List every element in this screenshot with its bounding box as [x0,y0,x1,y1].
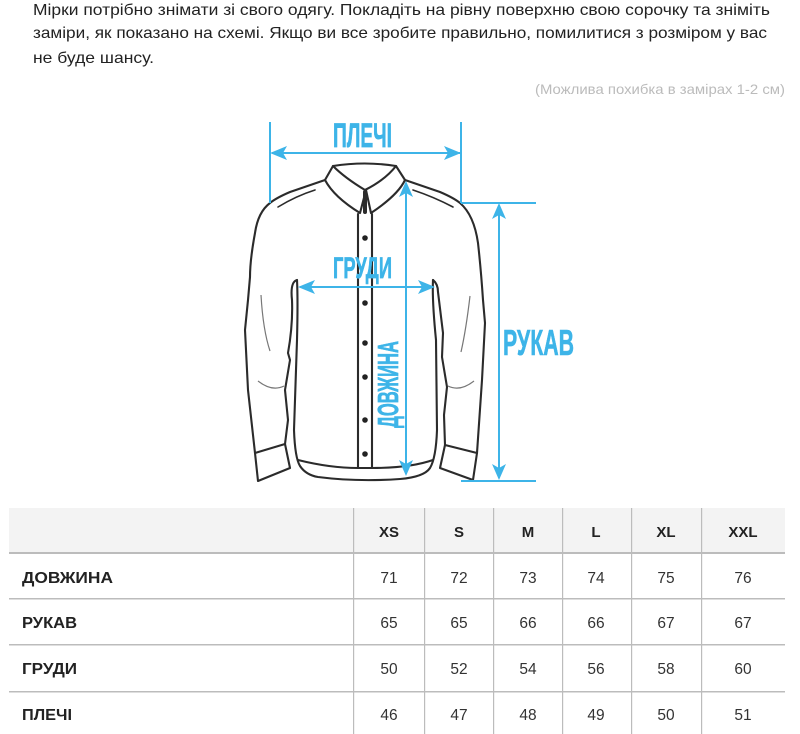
intro text: Мірки потрібно знімати зі свого одягу. Покладіть на рівну поверхню свою сорочку та зніміть [33,2,770,19]
shoulder measure arrow [269,122,462,203]
table values: 56 [587,661,605,678]
row labels: ДОВЖИНА [22,570,113,587]
table values: 72 [450,570,468,587]
shirt outline [245,164,485,481]
chest measure arrow [298,280,435,294]
table values: 48 [519,707,537,724]
table values: 51 [734,707,752,724]
table values: 60 [734,661,752,678]
sleeve label: РУКАВ [503,322,574,363]
table values: 52 [450,661,468,678]
size headers [379,524,758,541]
table values: 75 [657,570,675,587]
table values: 58 [657,661,675,678]
table values: 74 [587,570,605,587]
measurement error note: (Можлива похибка в замірах 1-2 см) [535,81,785,97]
table values: 65 [380,615,398,632]
table values: 65 [450,615,468,632]
shirt diagram [245,164,485,481]
table values: 54 [519,661,537,678]
row labels: РУКАВ [22,615,77,632]
table header background [9,508,785,553]
table values: 46 [380,707,398,724]
size headers: XXL [728,524,758,541]
table values [380,570,752,724]
table values: 67 [657,615,675,632]
table values: 66 [587,615,605,632]
table values: 66 [519,615,537,632]
size headers: M [522,524,534,541]
size table [9,508,785,734]
length measure arrow [399,181,413,476]
table values: 67 [734,615,752,632]
length label: ДОВЖИНА [373,341,405,428]
shoulder label: ПЛЕЧІ [333,117,392,155]
table values: 47 [450,707,468,724]
sleeve measure arrow [461,202,536,482]
table values: 76 [734,570,752,587]
table values: 49 [587,707,605,724]
intro text: заміри, як показано на схемі. Якщо ви все зробите правильно, помилитися з розміром у вас [33,25,767,42]
intro text [33,2,770,67]
table values: 50 [657,707,675,724]
table values: 71 [380,570,398,587]
sleeve creases [258,295,474,388]
size headers: XS [379,524,399,541]
buttons [362,235,368,457]
chest label: ГРУДИ [333,252,392,285]
table grid [9,508,785,734]
size headers: S [454,524,464,541]
size headers: L [591,524,601,541]
table values: 73 [519,570,537,587]
intro text: не буде шансу. [33,50,154,67]
row labels [22,570,113,724]
row labels: ГРУДИ [22,661,77,678]
row labels: ПЛЕЧІ [22,707,72,724]
table values: 50 [380,661,398,678]
size headers: XL [656,524,676,541]
